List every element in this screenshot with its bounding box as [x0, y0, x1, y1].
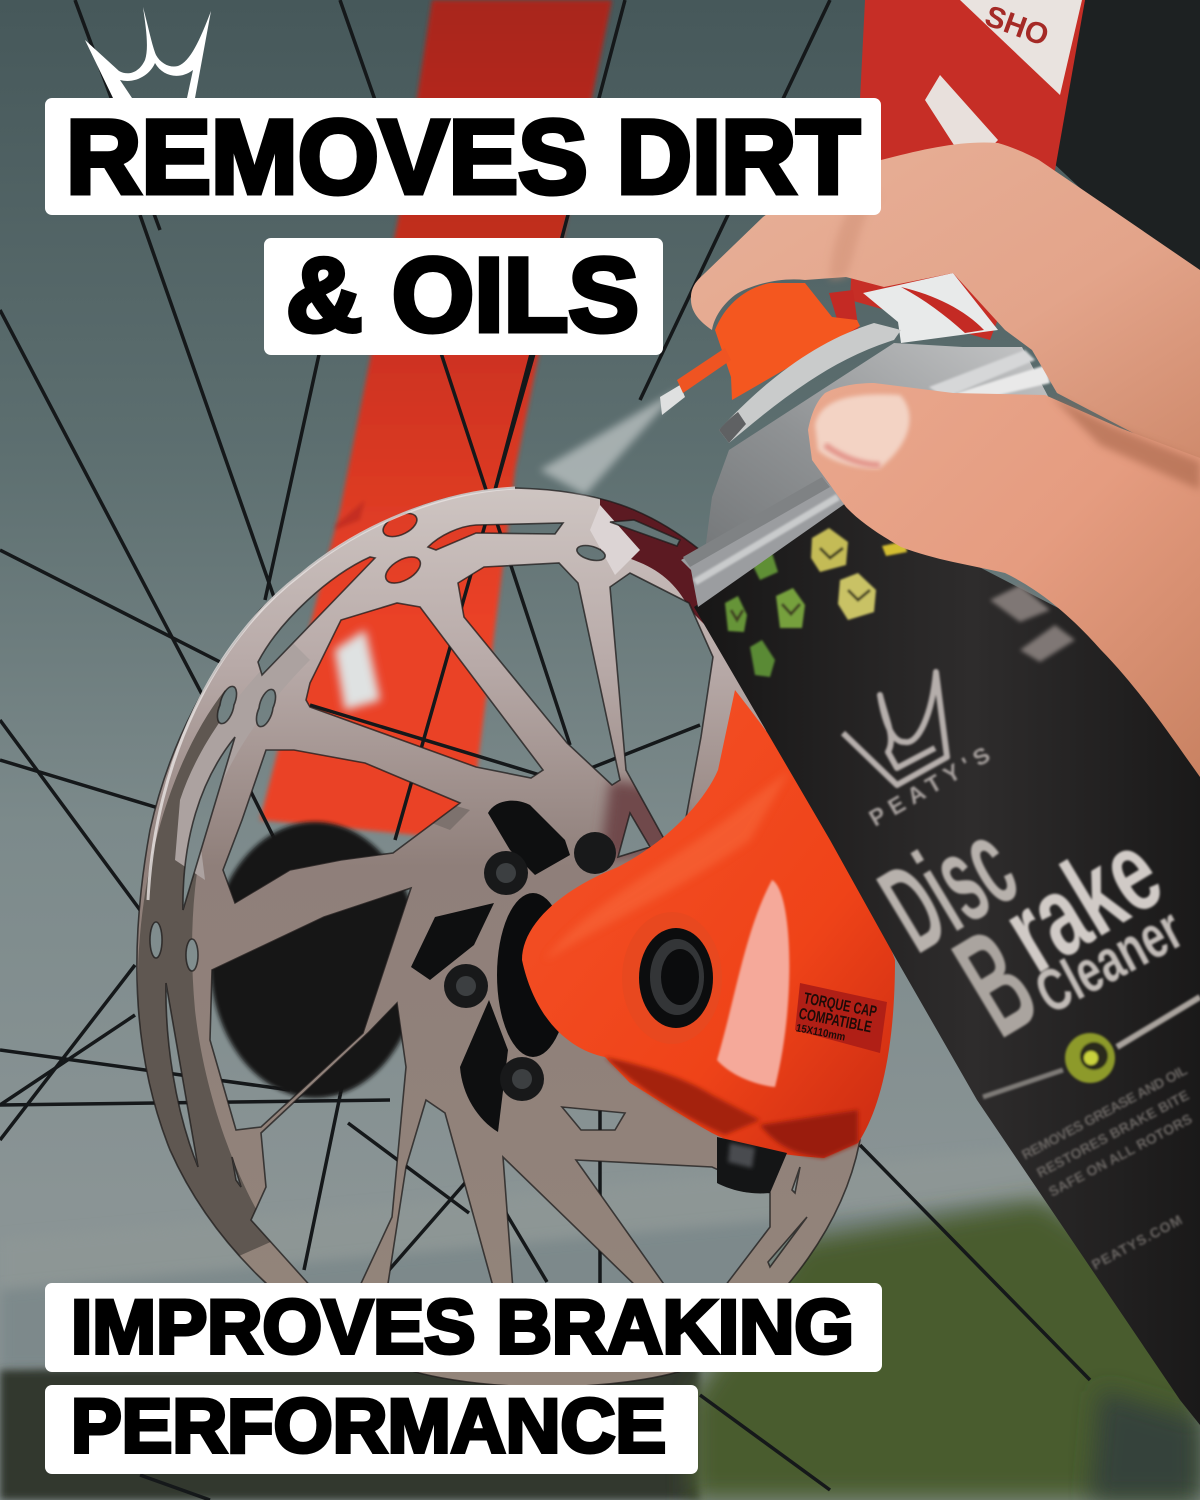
small print on can [1019, 1061, 1195, 1273]
hand: thumb [808, 383, 1200, 777]
fork crown and decal, upper right [829, 0, 1200, 345]
bottom label: improves braking: IMPROVES BRAKING [71, 1285, 854, 1370]
product name: Disc [859, 795, 1038, 978]
product name [859, 795, 1193, 1067]
torque cap sticker: COMPATIBLE [797, 1006, 873, 1036]
torque cap sticker [795, 983, 887, 1053]
bottom label: performance: PERFORMANCE [71, 1384, 666, 1469]
spray can body [694, 500, 1200, 1425]
can label badge [983, 997, 1200, 1097]
axle bolt [622, 912, 722, 1044]
blurred label marks beneath the thumb [990, 585, 1075, 662]
fork lower leg: orange [522, 690, 895, 1158]
fork crown and decal, upper right: SHO [981, 0, 1053, 53]
hub shadow behind rotor [210, 822, 640, 1112]
spray mist [540, 385, 685, 495]
can top ring [719, 323, 901, 443]
small print on can: PEATYS.COM [1089, 1212, 1185, 1273]
brand name: PEATY'S [864, 741, 994, 831]
fork foot bolt [717, 1137, 787, 1193]
hand: index finger [691, 142, 1200, 467]
hub bolts and carrier [411, 801, 616, 1132]
torque cap sticker: TORQUE CAP [802, 990, 878, 1021]
torque cap sticker: 15X110mm [795, 1022, 846, 1044]
small print on can: RESTORES BRAKE BITE [1034, 1087, 1192, 1181]
brake disc rotor [120, 480, 880, 1400]
can logo crown [843, 672, 947, 785]
chevron crown pattern on can [725, 528, 907, 677]
spray nozzle: orange [677, 283, 860, 400]
headline label: removes dirt: REMOVES DIRT [66, 99, 860, 216]
small print on can: REMOVES GREASE AND OIL [1019, 1061, 1190, 1163]
headline label: and oils: & OILS [286, 237, 639, 354]
fork upper tube: red [260, 0, 612, 840]
can dome and ribbed collar [681, 343, 1050, 607]
small print on can: SAFE ON ALL ROTORS [1046, 1110, 1195, 1200]
product name: B [930, 897, 1061, 1067]
crown logo [85, 7, 211, 98]
